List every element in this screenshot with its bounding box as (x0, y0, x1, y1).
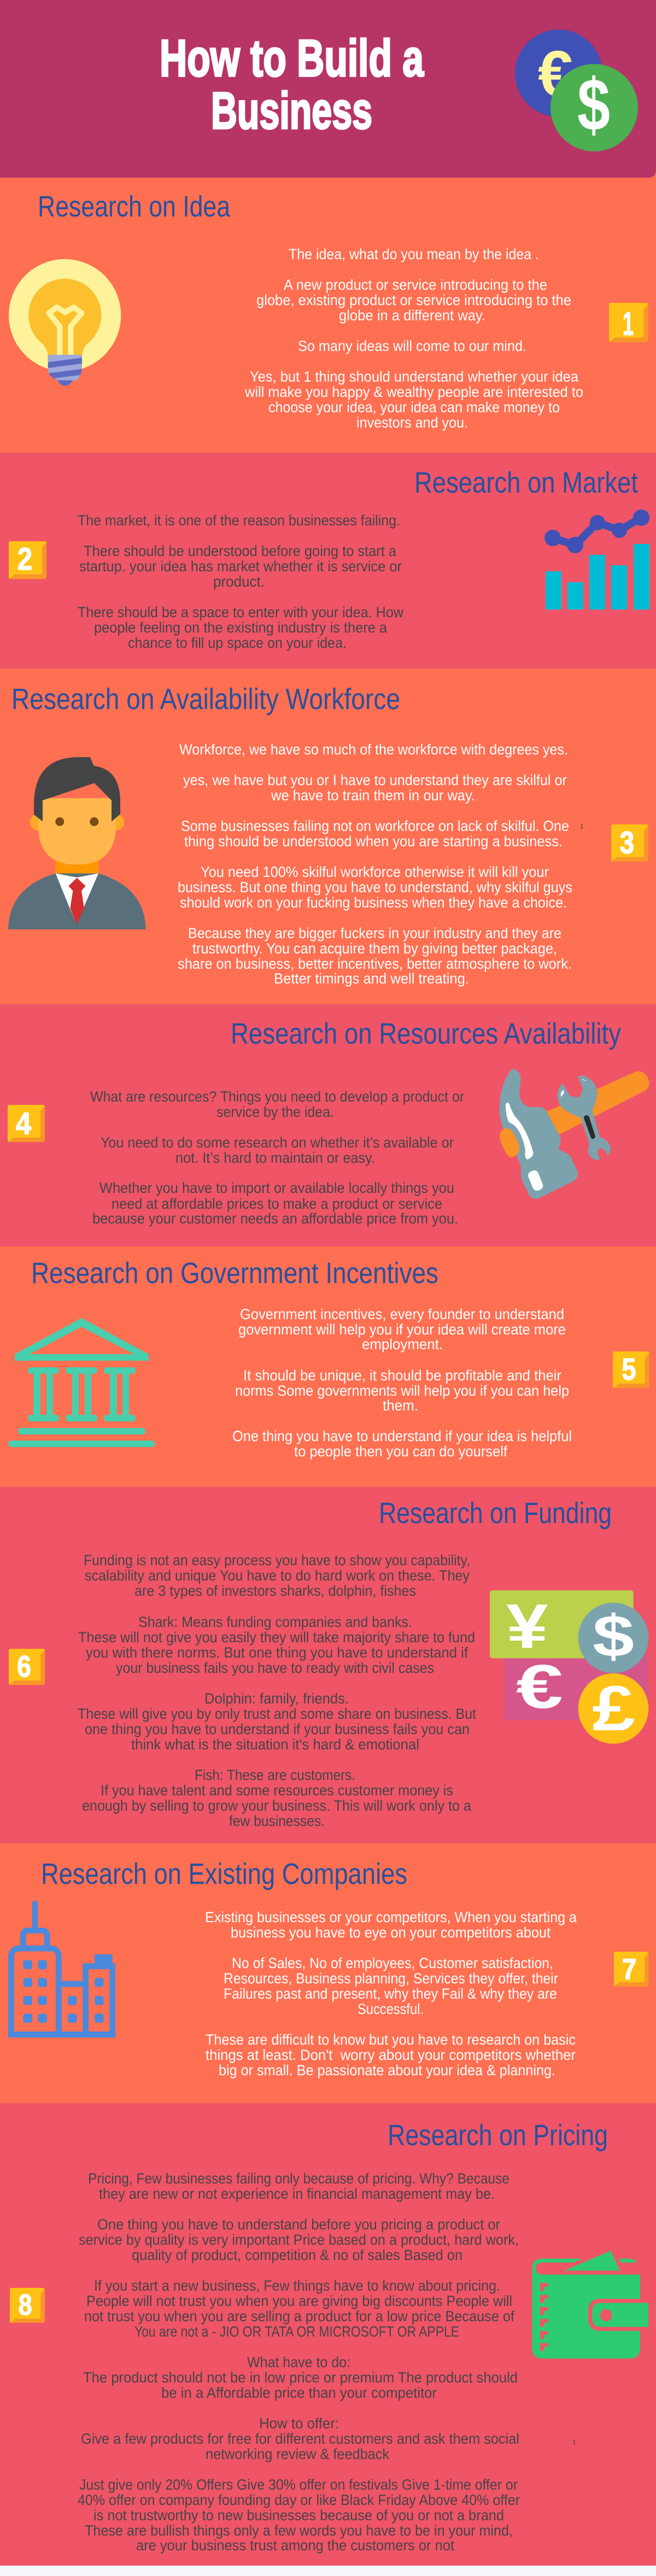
text: resources explanation: Whether you have to import or available locally things you (99, 1180, 454, 1196)
text: workforce explanation: share on business, better incentives, better atmosphere to work. (178, 956, 572, 972)
text: existing companies explanation: big or small. Be passionate about your idea & planning. (219, 2062, 555, 2079)
icon: euro and dollar coins: $ (577, 63, 610, 146)
text: government incentives explanation: norms Some governments will help you if you can help (235, 1383, 569, 1399)
text: funding explanation: think what is the situation it's hard & emotional (131, 1736, 419, 1753)
panel: research on market (0, 453, 656, 669)
heading: research on availability workforce: Research on Availability Workforce (11, 683, 400, 716)
text: resources explanation: need at affordable prices to make a product or service (112, 1196, 442, 1212)
panel: header (0, 0, 656, 178)
badge: number 7 (614, 1952, 649, 1987)
icon: businessman (8, 757, 146, 929)
panel: research on funding (0, 1487, 656, 1843)
text: existing companies explanation (205, 1909, 577, 2079)
text: funding explanation: are 3 types of investors sharks, dolphin, fishes (134, 1583, 416, 1599)
text: pricing explanation: Just give only 20% Offers Give 30% offer on festivals Give 1-time offer or (79, 2477, 518, 2493)
text: market explanation: people feeling on the existing industry is there a (94, 619, 388, 636)
badge: number 3 (611, 824, 648, 862)
text: funding explanation: Dolphin: family, friends. (204, 1690, 349, 1707)
text: resources explanation: service by the idea. (216, 1104, 334, 1120)
text: pricing explanation: The product should not be in low price or premium The product should (83, 2369, 518, 2386)
text: funding explanation: These will give you by only trust and some share on business. But (78, 1706, 476, 1722)
text: resources explanation: What are resources? Things you need to develop a product or (90, 1088, 464, 1105)
badge: number 4: 4 (16, 1106, 31, 1141)
panel: research on government incentives (0, 1246, 656, 1487)
text: existing companies explanation: Resources, Business planning, Services they offer, their (224, 1970, 558, 1987)
heading: research on funding: Research on Funding (379, 1497, 612, 1530)
text: government incentives explanation: It should be unique, it should be profitable and their (243, 1367, 561, 1384)
icon: hammer and wrench (499, 1069, 649, 1199)
text: government incentives explanation: to people then you can do yourself (294, 1443, 507, 1460)
text: existing companies explanation: Successful. (358, 2001, 424, 2017)
badge: number 4 (8, 1105, 45, 1142)
text: government incentives explanation: employment. (362, 1336, 443, 1353)
text: pricing explanation: These are bullish things only a few words you have to be in your mind, (85, 2522, 513, 2539)
text: existing companies explanation: Failures past and present, why they Fail & why they are (224, 1986, 557, 2002)
text: idea explanation (244, 246, 583, 431)
text: workforce explanation (178, 741, 572, 987)
text: funding explanation: your business fails you have to ready with civil cases (116, 1660, 434, 1676)
text: workforce explanation: thing should be understood when you are starting a business. (184, 833, 563, 850)
icon: light bulb (9, 259, 121, 386)
text: funding explanation: scalability and unique You have to do hard work on these. They (85, 1567, 470, 1584)
heading: research on existing companies: Research on Existing Companies (41, 1858, 407, 1890)
text: workforce explanation: Some businesses failing not on workforce on lack of skilful. One (181, 818, 569, 834)
icon: currencies (490, 1590, 648, 1744)
text: resources explanation: because your customer needs an affordable price from you. (92, 1210, 458, 1227)
text: workforce explanation: Because they are bigger fuckers in your industry and they are (188, 925, 561, 941)
text: market explanation: chance to fill up space on your idea. (128, 635, 347, 651)
icon: wallet (532, 2251, 648, 2358)
text: funding explanation: one thing you have to understand if your business fails you can (85, 1721, 470, 1737)
icon: euro and dollar coins (515, 30, 638, 151)
heading: research on government incentives: Research on Government Incentives (31, 1257, 438, 1290)
title: Business (211, 82, 372, 140)
text: market explanation: There should be understood before going to start a (84, 543, 397, 559)
text: pricing explanation: What have to do: (247, 2354, 350, 2370)
badge: number 5: 5 (622, 1352, 636, 1386)
text: funding explanation (78, 1552, 476, 1829)
badge: number 6: 6 (17, 1649, 31, 1683)
badge: number 8: 8 (19, 2288, 32, 2321)
text: market explanation: The market, it is one of the reason businesses failing. (78, 512, 400, 529)
text: resources explanation: not. It’s hard to maintain or easy. (175, 1150, 375, 1166)
text: pricing explanation: How to offer: (259, 2415, 339, 2432)
text: workforce explanation: should work on your fucking business when they have a choice. (180, 894, 567, 911)
badge: number 1 (609, 303, 648, 342)
icon: government building (8, 1318, 155, 1447)
badge: number 3: 3 (620, 825, 634, 860)
icon: currencies: € (516, 1652, 563, 1721)
text: pricing explanation: Pricing, Few businesses failing only because of pricing. Why? Because (88, 2170, 509, 2187)
text: existing companies explanation: business you have to eye on your competitors about (231, 1924, 550, 1941)
text: idea explanation: So many ideas will come to our mind. (298, 338, 526, 354)
text: pricing explanation: 40% offer on company founding day or like Black Friday Above 40% offer (78, 2492, 520, 2508)
text: market explanation: There should be a space to enter with your idea. How (78, 604, 403, 620)
panel: research on existing companies (0, 1843, 656, 2103)
badge: number 6 (9, 1649, 45, 1685)
text: market explanation (78, 512, 403, 651)
text: idea explanation: globe in a different way. (339, 307, 485, 324)
text: workforce explanation: Workforce, we have so much of the workforce with degrees yes. (179, 741, 568, 758)
text: idea explanation: Yes, but 1 thing should understand whether your idea (250, 368, 579, 385)
icon: city buildings (8, 1901, 115, 2038)
text: pricing explanation: quality of product, competition & no of sales Based on (132, 2247, 462, 2263)
badge: number 2: 2 (17, 541, 32, 576)
text: funding explanation: few businesses. (229, 1813, 325, 1829)
text: pricing explanation: networking review & feedback (206, 2446, 389, 2462)
text: funding explanation: If you have talent and some resources customer money is (101, 1782, 453, 1799)
text: pricing explanation: Give a few products for free for different customers and ask them social (81, 2431, 519, 2447)
panel: research on resources availability (0, 1004, 656, 1246)
text: idea explanation: globe, existing product or service introducing to the (256, 292, 571, 308)
text: workforce explanation: trustworthy. You can acquire them by giving better package, (192, 940, 557, 957)
text: pricing explanation: be in a Affordable price than your competitor (161, 2385, 437, 2401)
text: workforce explanation: business. But one thing you have to understand, why skilful guys (178, 879, 572, 895)
text: government incentives explanation (232, 1306, 572, 1460)
footnote mark: 1 (580, 822, 584, 830)
text: government incentives explanation: One thing you have to understand if your idea is helpful (232, 1428, 572, 1444)
text: funding explanation: Shark: Means funding companies and banks. (138, 1614, 412, 1630)
text: pricing explanation: If you start a new business, Few things have to know about pricing. (94, 2278, 500, 2294)
icon: currencies: ¥ (506, 1591, 549, 1661)
text: workforce explanation: we have to train them in our way. (271, 787, 475, 804)
text: pricing explanation: not trust you when you are selling a product for a low price Because of (84, 2308, 514, 2325)
text: resources explanation: You need to do some research on whether it’s available or (101, 1134, 454, 1151)
icon: currencies: £ (592, 1673, 635, 1744)
text: existing companies explanation: Existing businesses or your competitors, When you starting a (205, 1909, 577, 1925)
icon: growth chart (544, 510, 649, 610)
text: market explanation: startup. your idea has market whether it is service or (79, 558, 402, 575)
title (160, 30, 424, 140)
heading: research on pricing: Research on Pricing (388, 2119, 608, 2152)
text: funding explanation: you with there norms. But one thing you have to understand if (86, 1644, 468, 1661)
text: government incentives explanation: them. (383, 1397, 418, 1414)
text: idea explanation: A new product or service introducing to the (284, 277, 547, 293)
text: existing companies explanation: things at least. Don't worry about your competitors whether (206, 2047, 576, 2063)
badge: number 1: 1 (623, 306, 634, 342)
text: government incentives explanation: government will help you if your idea will create more (238, 1321, 566, 1338)
panel: research on availability workforce (0, 669, 656, 1004)
text: workforce explanation: You need 100% skilful workforce otherwise it will kill your (201, 864, 549, 880)
text: funding explanation: enough by selling to grow your business. This will work only to a (82, 1798, 472, 1814)
text: market explanation: product. (213, 573, 265, 590)
text: pricing explanation: service by quality is very important Price based on a product, hard work, (79, 2232, 519, 2248)
text: workforce explanation: yes, we have but you or I have to understand they are skilful or (183, 772, 567, 788)
badge: number 7: 7 (622, 1953, 636, 1986)
text: government incentives explanation: Government incentives, every founder to understand (240, 1306, 564, 1322)
text: resources explanation (90, 1088, 464, 1227)
text: pricing explanation: is not trustworthy to new businesses because of you or not a brand (93, 2507, 504, 2524)
text: pricing explanation (78, 2170, 520, 2554)
icon: euro and dollar coins: € (538, 38, 573, 110)
text: funding explanation: Funding is not an easy process you have to show you capability, (84, 1552, 470, 1568)
text: funding explanation: Fish: These are customers. (195, 1767, 355, 1783)
text: pricing explanation: One thing you have to understand before you pricing a product or (97, 2216, 500, 2233)
badge: number 5 (613, 1351, 649, 1388)
text: pricing explanation: People will not trust you when you are giving big discounts People will (86, 2293, 512, 2309)
badge: number 2 (9, 541, 46, 579)
text: idea explanation: will make you happy & wealthy people are interested to (244, 384, 583, 400)
text: idea explanation: choose your idea, your idea can make money to (268, 399, 560, 415)
text: idea explanation: The idea, what do you mean by the idea . (289, 246, 539, 262)
text: pricing explanation: they are new or not experience in financial management may be. (99, 2186, 495, 2202)
text: idea explanation: investors and you. (356, 414, 468, 431)
text: pricing explanation: You are not a - JIO OR TATA OR MICROSOFT OR APPLE (134, 2323, 459, 2340)
footnote mark: 1 (572, 2438, 576, 2446)
text: existing companies explanation: These are difficult to know but you have to research on basic (206, 2031, 576, 2048)
text: existing companies explanation: No of Sales, No of employees, Customer satisfaction, (232, 1955, 553, 1971)
text: funding explanation: These will not give you easily they will take majority share to fund (78, 1629, 475, 1646)
title: How to Build a (160, 30, 424, 87)
icon: currencies: $ (593, 1603, 634, 1669)
panel: research on idea (0, 178, 656, 453)
heading: research on idea: Research on Idea (38, 190, 231, 223)
badge: number 8 (10, 2288, 45, 2323)
panel: research on pricing (0, 2103, 656, 2566)
text: pricing explanation: are your business trust among the customers or not (136, 2537, 454, 2554)
text: workforce explanation: Better timings and well treating. (274, 970, 469, 987)
